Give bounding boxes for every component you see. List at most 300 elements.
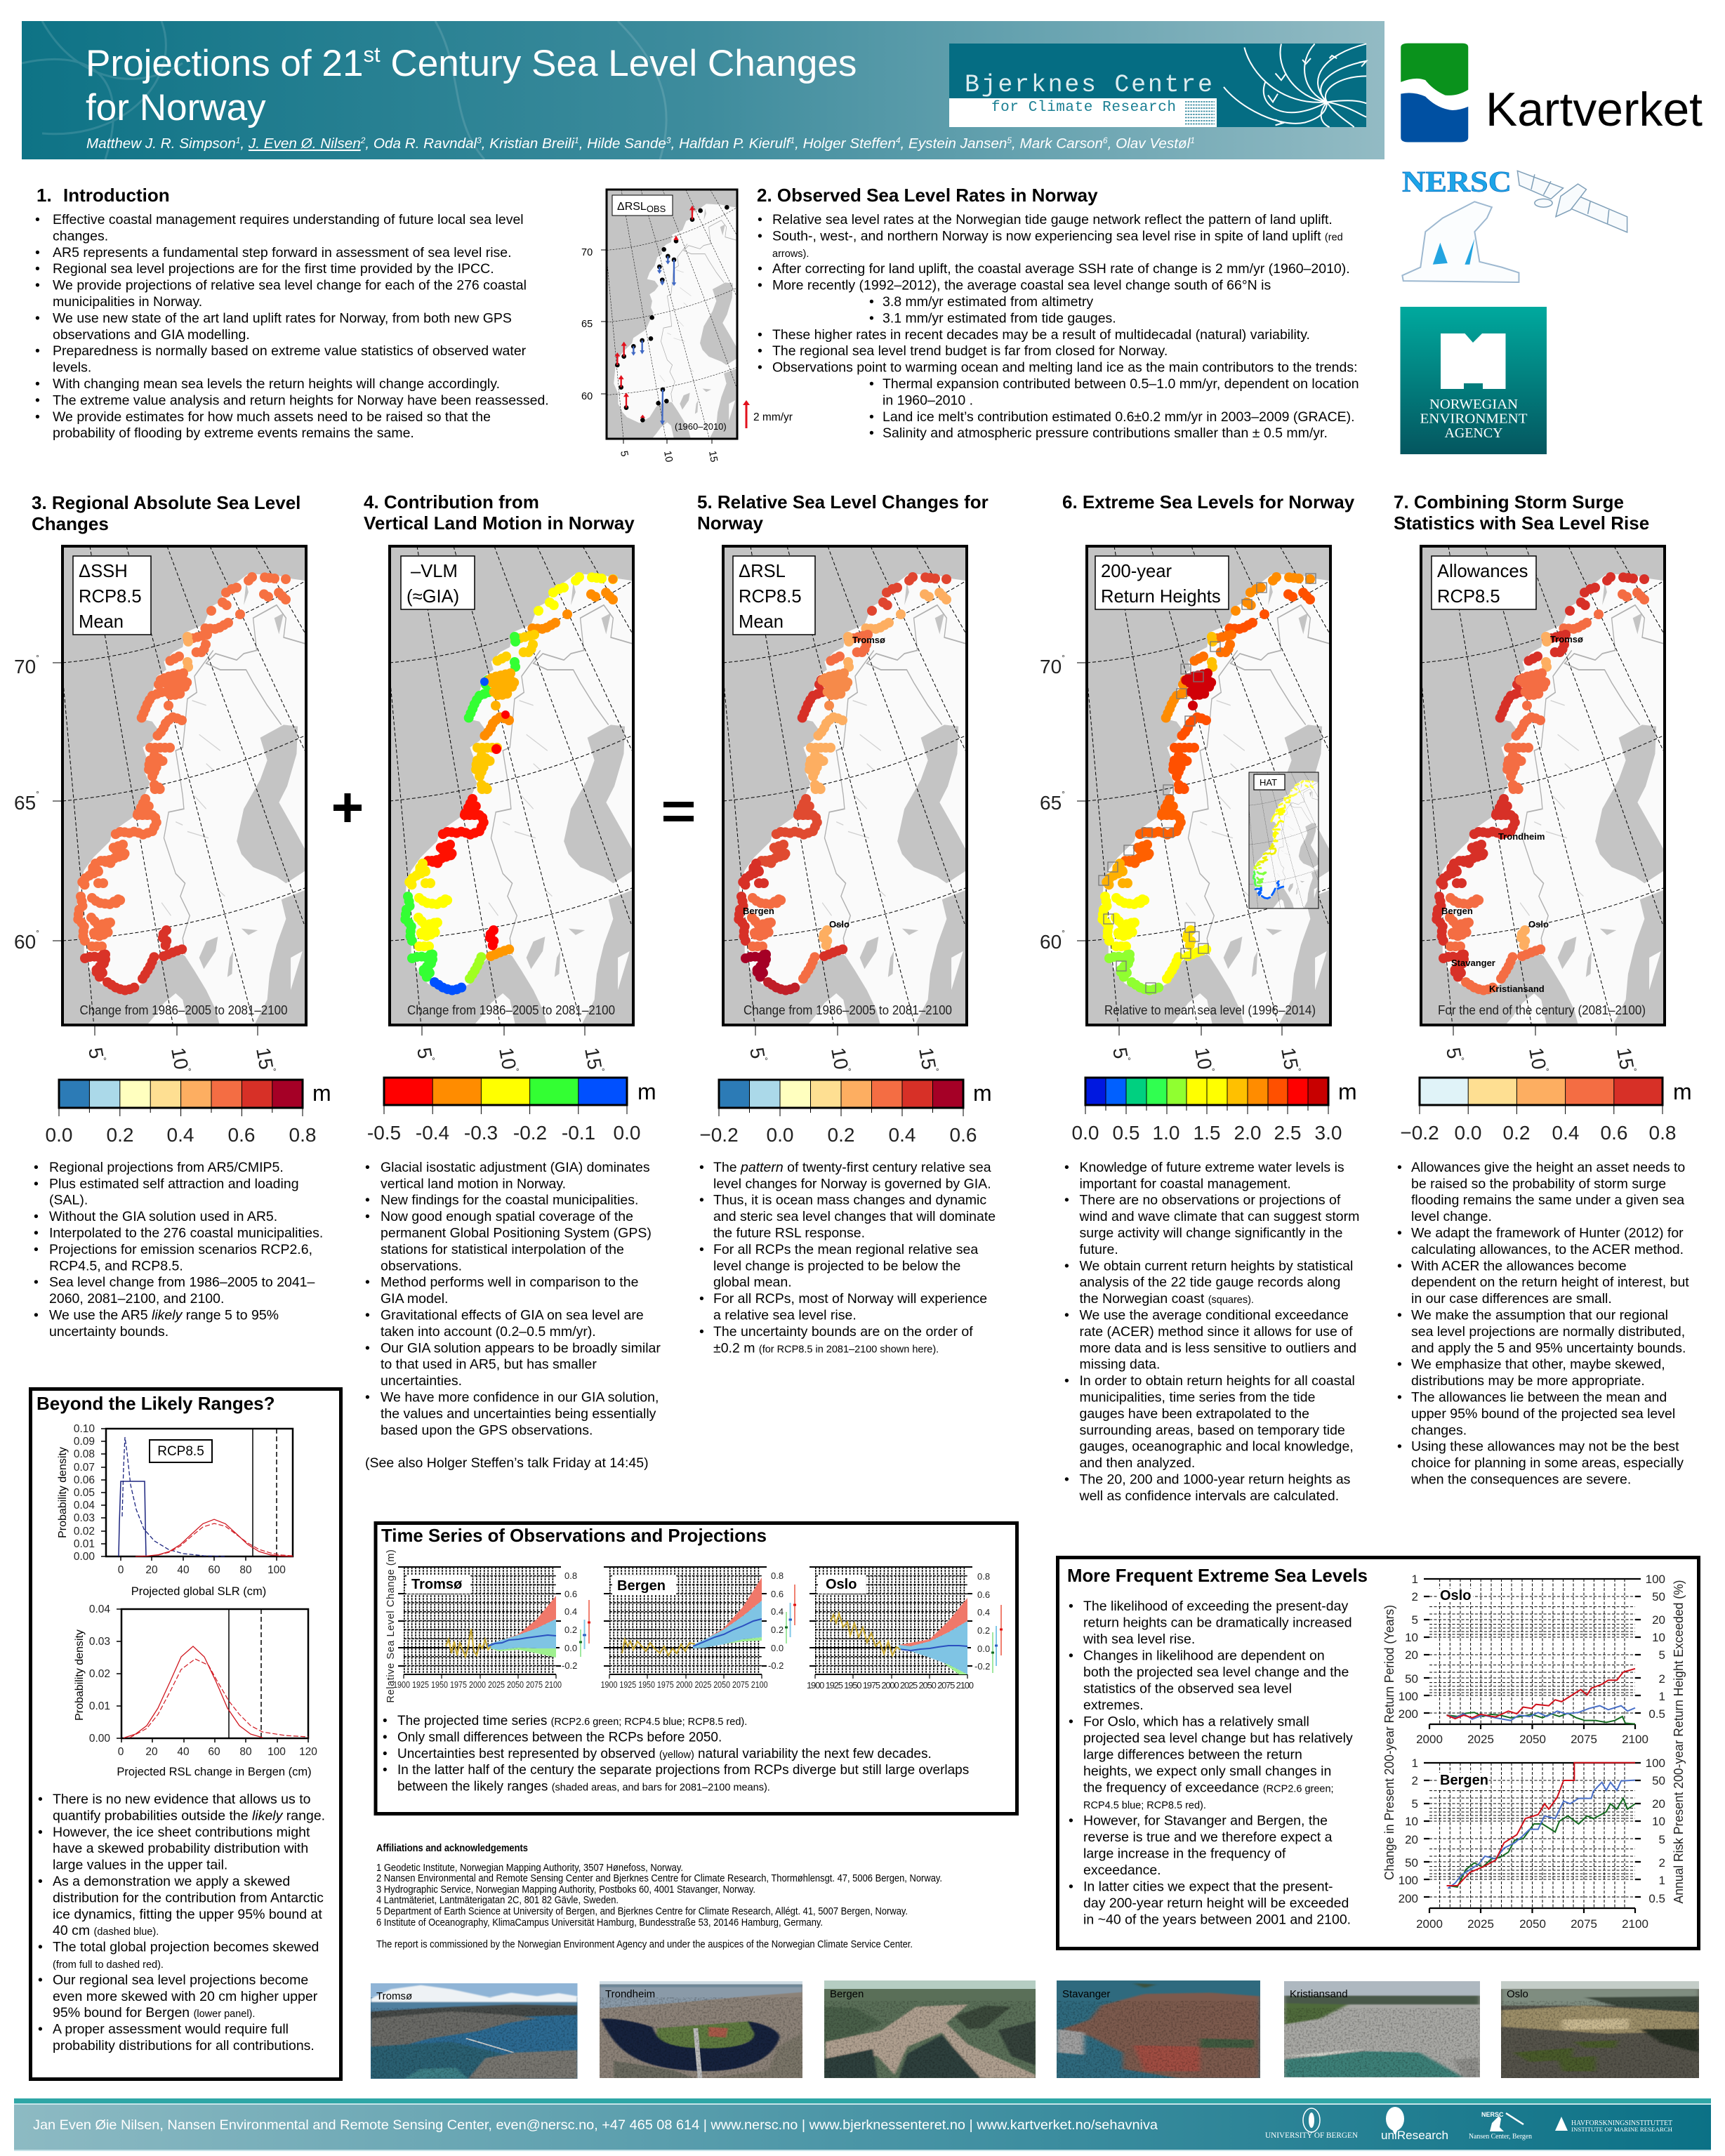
bullet list: the frequency of exceedance <box>1083 1780 1263 1796</box>
chart: projected RSL change in Bergen: 0.04 <box>89 1603 110 1615</box>
bullet list: 95% bound for Bergen <box>53 2005 194 2021</box>
chart: Bergen return period: 2025 <box>1467 1917 1494 1931</box>
longitude labels: ° <box>1456 1057 1466 1062</box>
longitude labels: ° <box>1206 1067 1217 1073</box>
bullet list: The uncertainty bounds are on the order of <box>713 1324 973 1340</box>
photo: Stavanger: Stavanger <box>1062 1988 1110 2000</box>
city labels: Stavanger <box>1451 958 1495 968</box>
legend: Mean <box>739 612 784 632</box>
logo: Nansen Center: Nansen Center, Bergen <box>1469 2133 1532 2141</box>
latitude labels: ° <box>1062 789 1065 799</box>
bullet list: • <box>365 1307 370 1323</box>
latitude labels: ° <box>36 653 39 663</box>
bullet list: Using these allowances may not be the best <box>1411 1439 1679 1455</box>
bullet list: • <box>365 1160 370 1175</box>
observation legend: OBS <box>647 204 666 214</box>
bullet list: Method performs well in comparison to the <box>381 1275 638 1290</box>
colour bar: 0.8 <box>1649 1122 1676 1144</box>
photo: Bergen <box>824 1980 1036 2078</box>
bullet list: • <box>1064 1258 1069 1274</box>
panel: 3. Regional Absolute Sea Level Changes <box>14 492 331 1340</box>
bullet list: • <box>1397 1439 1402 1455</box>
chart: projected RSL change in Bergen: 0 <box>118 1746 124 1758</box>
bullet list: There is no new evidence that allows us to <box>53 1792 311 1807</box>
bullet list: Plus estimated self attraction and loading <box>49 1176 299 1191</box>
bullet list: (dashed blue). <box>94 1926 159 1938</box>
chart: projected global SLR: 0.08 <box>74 1448 95 1460</box>
latitude labels: ° <box>36 789 39 799</box>
bullet list: • <box>1069 1599 1073 1614</box>
bullet list: • <box>38 1940 43 1955</box>
chart: Bergen return period <box>1399 1757 1665 1931</box>
panel: More Frequent Extreme Sea Levels <box>1057 1557 1699 1949</box>
chart: projected RSL change in Bergen: 0.03 <box>89 1636 110 1648</box>
bullet list: RCP4.5, and RCP8.5. <box>49 1258 183 1274</box>
colour bar: 0.0 <box>767 1124 793 1146</box>
bullet list: • <box>758 327 762 343</box>
heading: Time Series of Observations and Projections <box>381 1525 767 1546</box>
caption: Change from 1986–2005 to 2081–2100 <box>407 1003 615 1017</box>
axis labels: 70 <box>581 247 593 258</box>
heading: Vertical Land Motion in Norway <box>364 512 635 534</box>
bullet list: There are no observations or projections of <box>1080 1193 1341 1208</box>
chart: projected global SLR <box>57 1423 293 1598</box>
bullet list: • <box>869 294 874 310</box>
bullet list: calculating allowances, to the ACER method. <box>1411 1242 1684 1257</box>
bullet list: • <box>699 1324 704 1340</box>
chart: Bergen return period: 2075 <box>1571 1917 1597 1931</box>
bullet list: Relative sea level rates at the Norwegian tide gauge network reflect the pattern of land uplift. <box>772 212 1333 227</box>
longitude labels: 5 <box>1109 1046 1132 1060</box>
chart: projected RSL change in Bergen: 80 <box>239 1746 252 1758</box>
bullet list: • <box>758 228 762 244</box>
observation legend <box>612 195 673 216</box>
affiliations and acknowledgements: 3 Hydrographic Service, Norwegian Mapping Authority, Postboks 60, 4001 Stavanger, Norway. <box>376 1884 755 1896</box>
chart: Oslo: -0.2 <box>974 1661 990 1672</box>
longitude labels: ° <box>98 1057 108 1062</box>
chart: projected global SLR: 0.03 <box>74 1512 95 1524</box>
affiliations and acknowledgements: 2 Nansen Environmental and Remote Sensing Center and Bjerknes Centre for Climate Research, Thormøhlensgt. 47, 5006 Bergen, Norway. <box>376 1873 942 1884</box>
bullet list: • <box>38 1874 43 1889</box>
colour bar: 0.4 <box>889 1124 916 1146</box>
bullet list: We have more confidence in our GIA solution, <box>381 1390 659 1406</box>
logo: Bjerknes Centre <box>949 44 1366 127</box>
bullet list: changes. <box>53 228 108 244</box>
longitude labels: 15 <box>581 1046 606 1071</box>
bullet list: • <box>34 1275 39 1290</box>
colour bar: -0.3 <box>464 1122 498 1144</box>
chart: Bergen return period: 2000 <box>1416 1917 1443 1931</box>
chart: Bergen return period: 1 <box>1659 1874 1665 1887</box>
chart: Tromsø: -0.2 <box>562 1660 577 1671</box>
photo: Kristiansand: Kristiansand <box>1290 1988 1348 2000</box>
panel: 7. Combining Storm Surge Statistics <box>1394 491 1692 1487</box>
bullet list: 3.1 mm/yr estimated from tide gauges. <box>883 310 1116 326</box>
bullet list: After correcting for land uplift, the coastal average SSH rate of change is 2 mm/yr (1960–2010). <box>772 261 1350 277</box>
bullet list: We use the average conditional exceedance <box>1080 1307 1349 1323</box>
bullet list: • <box>38 1825 43 1840</box>
bullet list: (shaded areas, and bars for 2081–2100 means). <box>552 1783 770 1794</box>
heading: 5. Relative Sea Level Changes for <box>697 491 989 512</box>
chart: projected RSL change in Bergen: 0.00 <box>89 1733 110 1745</box>
bullet list: Gravitational effects of GIA on sea level are <box>381 1307 644 1323</box>
bullet list: The pattern of twenty-first century relative sea <box>713 1160 991 1175</box>
bullet list: level change is projected to be below the <box>713 1258 960 1274</box>
authors: Matthew J. R. Simpson <box>86 135 236 152</box>
bullet list: • <box>34 1176 39 1191</box>
colour bar: 0.2 <box>107 1124 133 1146</box>
chart: projected global SLR: 60 <box>208 1564 220 1576</box>
logo: University of Bergen: UNIVERSITY OF BERGEN <box>1265 2131 1359 2140</box>
bullet list: • <box>1064 1160 1069 1175</box>
chart: Bergen return period: 2050 <box>1519 1917 1546 1931</box>
bullet list: Thermal expansion contributed between 0.5–1.0 mm/yr, dependent on location <box>883 376 1359 392</box>
latitude labels: 70 <box>1040 656 1062 677</box>
colour bar: -0.2 <box>513 1122 547 1144</box>
bullet list: • <box>869 409 874 425</box>
longitude labels: ° <box>1628 1067 1639 1073</box>
bullet list: In the latter half of the century the separate projections from RCPs diverge but still large overlaps <box>397 1763 969 1778</box>
map: return heights <box>1077 546 1330 1036</box>
bullet list: Preparedness is normally based on extreme value statistics of observed water <box>53 343 527 359</box>
title: st <box>363 42 381 67</box>
colour bar: 0.4 <box>167 1124 194 1146</box>
bullet list: • <box>38 2022 43 2037</box>
longitude labels: ° <box>1123 1057 1132 1062</box>
authors: 3 <box>477 135 482 145</box>
bullet list: taken into account (0.2–0.5 mm/yr). <box>381 1324 596 1340</box>
bullet list: • <box>34 1209 39 1224</box>
scale arrow: 2 mm/yr <box>753 411 793 423</box>
bullet list: municipalities in Norway. <box>53 294 202 310</box>
longitude labels <box>84 1046 278 1075</box>
bullet list: • <box>34 1226 39 1241</box>
authors: , Oda R. Ravndal <box>365 135 477 152</box>
legend: Return Heights <box>1101 587 1221 607</box>
affiliations and acknowledgements: Affiliations and acknowledgements <box>376 1843 528 1854</box>
bullet list: and apply the 5 and 95% uncertainty bounds. <box>1411 1340 1686 1356</box>
photo: Tromsø: Tromsø <box>376 1990 412 2002</box>
chart: projected global SLR: 0 <box>118 1564 124 1576</box>
bullet list: We use new state of the art land uplift rates for Norway, from both new GPS <box>53 310 512 326</box>
bullet list: (See also Holger Steffen’s talk Friday at 14:45) <box>365 1455 649 1471</box>
bullet list: Knowledge of future extreme water levels is <box>1080 1160 1344 1175</box>
bullet list: • <box>365 1193 370 1208</box>
bullet list: We use the AR5 likely range 5 to 95% <box>49 1307 279 1323</box>
colour bar: 0.0 <box>1455 1122 1481 1144</box>
longitude labels: 5 <box>1442 1046 1465 1060</box>
chart: Oslo return period: 2000 <box>1416 1733 1443 1746</box>
legend <box>1095 556 1229 609</box>
bullet list: large values in the upper tail. <box>53 1858 227 1873</box>
chart: Oslo: 0.8 <box>977 1571 990 1582</box>
chart: Oslo return period: 0.5 <box>1648 1707 1665 1721</box>
bullet list: future. <box>1080 1242 1118 1257</box>
contact text: Jan Even Øie Nilsen, Nansen Environmental and Remote Sensing Center, even@nersc.no, +47 465 08 614 | www.nersc.no | www.bjerknessenteret.no | www.kartverket.no/sehavniva <box>33 2117 1158 2133</box>
bullet list: However, for Stavanger and Bergen, the <box>1083 1813 1328 1828</box>
axis labels: 5 <box>618 450 630 458</box>
longitude labels: ° <box>760 1057 769 1062</box>
chart: Bergen <box>601 1567 796 1690</box>
caption: Change from 1986–2005 to 2081–2100 <box>80 1003 288 1017</box>
legend: Allowances <box>1437 562 1528 581</box>
bullet list: large differences between the return <box>1083 1747 1302 1762</box>
bullet list: uncertainty bounds. <box>49 1324 168 1340</box>
bullet list: • <box>1397 1390 1402 1406</box>
city labels: Bergen <box>1441 906 1473 916</box>
bullet list: A proper assessment would require full <box>53 2022 289 2037</box>
logo: Bjerknes Centre: Bjerknes Centre <box>965 71 1212 99</box>
bullet list: the values and uncertainties being essentially <box>381 1406 656 1422</box>
bullet list: Uncertainties best represented by observed <box>397 1747 659 1761</box>
city labels: Oslo <box>829 919 850 930</box>
chart: projected global SLR: 0.06 <box>74 1474 95 1486</box>
logo: University of Bergen <box>1265 2108 1359 2140</box>
city labels: Kristiansand <box>1489 984 1545 994</box>
bullet list: • <box>383 1747 388 1761</box>
chart: Bergen: 1900 1925 1950 1975 2000 2025 2050 2075 2100 <box>601 1679 768 1690</box>
photo: Oslo: Oslo <box>1507 1988 1528 2000</box>
colour bar: m <box>1338 1079 1357 1104</box>
map: VLM <box>390 546 633 1036</box>
bullet list: gauges, oceanographic and local knowledge, <box>1080 1439 1354 1455</box>
bullet list: exceedance. <box>1083 1863 1161 1878</box>
chart: Oslo return period: 10 <box>1405 1631 1418 1644</box>
bullet list: We provide projections of relative sea level change for each of the 276 coastal <box>53 278 527 293</box>
bullet list: and steric sea level changes that will dominate <box>713 1209 996 1224</box>
chart: Bergen return period: 100 <box>1399 1874 1418 1887</box>
bullet list: The projected time series <box>397 1714 551 1728</box>
chart: Tromsø: 0.0 <box>564 1643 577 1653</box>
heading: 4. Contribution from <box>364 491 539 512</box>
colour bar <box>1400 1078 1692 1144</box>
bullet list: 40 cm <box>53 1923 94 1938</box>
authors: , Mark Carson <box>1012 135 1103 152</box>
colour bar: -0.1 <box>562 1122 595 1144</box>
bullet list: to that used in AR5, but has smaller <box>381 1357 597 1373</box>
affiliations and acknowledgements: 4 Lantmäteriet, Lantmäterigatan 2C, 801 82 Gävle, Sweden. <box>376 1895 619 1906</box>
bullet list: in our case differences are small. <box>1411 1291 1612 1307</box>
bullet list: • <box>1069 1714 1073 1730</box>
city labels: Bergen <box>743 906 774 916</box>
authors: 1 <box>574 135 579 145</box>
bullet list: important for coastal management. <box>1080 1176 1291 1191</box>
bullet list: With ACER the allowances become <box>1411 1258 1627 1274</box>
bullet list: For all RCPs, most of Norway will experience <box>713 1291 987 1307</box>
affiliations and acknowledgements: 1 Geodetic Institute, Norwegian Mapping Authority, 3507 Hønefoss, Norway. <box>376 1863 683 1874</box>
chart: Bergen return period: 10 <box>1652 1815 1665 1828</box>
chart: projected global SLR: 40 <box>177 1564 190 1576</box>
legend: RCP8.5 <box>1437 587 1500 607</box>
heading: Beyond the Likely Ranges? <box>37 1393 275 1414</box>
longitude labels: 5 <box>413 1046 436 1060</box>
legend: RCP8.5 <box>739 587 802 607</box>
bullet list: quantify probabilities outside the likely range. <box>53 1808 325 1823</box>
bullet list: • <box>758 278 762 293</box>
bullet list: extremes. <box>1083 1698 1144 1713</box>
chart: projected global SLR: 80 <box>239 1564 252 1576</box>
caption: For the end of the century (2081–2100) <box>1438 1003 1646 1017</box>
chart: Tromsø: 1900 1925 1950 1975 2000 2025 2050 2075 2100 <box>393 1679 562 1690</box>
colour bar <box>46 1080 331 1146</box>
legend: 200-year <box>1101 562 1172 581</box>
heading: Statistics with Sea Level Rise <box>1394 512 1649 534</box>
logo: Uni Research: uniResearch <box>1381 2129 1448 2142</box>
bullet list: In latter cities we expect that the present- <box>1083 1879 1333 1894</box>
chart: Bergen return period: 2100 <box>1622 1917 1648 1931</box>
chart: Tromsø: 0.6 <box>564 1589 577 1599</box>
latitude labels: 65 <box>14 792 36 814</box>
legend: Mean <box>79 612 124 632</box>
colour bar: 0.6 <box>950 1124 977 1146</box>
bullet list: For Oslo, which has a relatively small <box>1083 1714 1309 1730</box>
icon: satellite <box>1517 171 1627 232</box>
y axis labels <box>1382 1580 1686 1904</box>
bullet list: • <box>869 310 874 326</box>
bullet list: In order to obtain return heights for all coastal <box>1080 1373 1355 1389</box>
chart: Oslo return period: 1 <box>1659 1690 1665 1703</box>
city labels: Tromsø <box>1550 634 1583 644</box>
bullet list: return heights can be dramatically increased <box>1083 1615 1352 1630</box>
panel: Time Series of Observations and Projections <box>376 1523 1017 1814</box>
panel: 2. Observed Sea Level Rates <box>757 185 1359 441</box>
bullet list: well as confidence intervals are calculated. <box>1078 1488 1339 1504</box>
chart: projected global SLR: 20 <box>145 1564 158 1576</box>
authors: 6 <box>1103 135 1108 145</box>
bullet list: (for RCP8.5 in 2081–2100 shown here). <box>759 1344 939 1355</box>
panel: 1. Introduction <box>35 185 549 441</box>
legend <box>401 556 475 609</box>
bullet list: • <box>35 392 40 408</box>
longitude labels: ° <box>1293 1067 1303 1073</box>
legend <box>73 556 151 635</box>
authors: , Kristian Breili <box>482 135 575 152</box>
colour bar <box>367 1078 656 1144</box>
longitude labels: ° <box>596 1067 607 1073</box>
chart: Oslo return period: 2 <box>1412 1590 1418 1603</box>
bullet list: • <box>1064 1193 1069 1208</box>
bullet list: Regional projections from AR5/CMIP5. <box>49 1160 284 1175</box>
bullet list: be raised so the probability of storm surge <box>1411 1176 1666 1191</box>
bullet list: rate (ACER) method since it allows for use of <box>1080 1324 1353 1340</box>
bullet list: when the consequences are severe. <box>1410 1471 1631 1487</box>
bullet list: reverse is true and we therefore expect a <box>1083 1830 1333 1845</box>
bullet list: Interpolated to the 276 coastal municipalities. <box>49 1226 323 1241</box>
city labels: Trondheim <box>1498 831 1545 842</box>
bullet list: Sea level change from 1986–2005 to 2041– <box>49 1275 315 1290</box>
longitude labels: ° <box>930 1067 941 1073</box>
chart: projected global SLR: Probability density <box>57 1447 69 1538</box>
icon: polar bear <box>1402 201 1519 282</box>
chart: Oslo return period: 20 <box>1652 1613 1665 1627</box>
longitude labels <box>1109 1046 1303 1075</box>
logo: Havforskningsinstituttet <box>1555 2117 1672 2133</box>
logo: Norwegian Environment Agency <box>1400 307 1547 454</box>
bullet list: • <box>1397 1357 1402 1373</box>
bullet list: • <box>1397 1226 1402 1241</box>
bullet list: missing data. <box>1080 1357 1160 1373</box>
chart: Bergen return period: 50 <box>1405 1856 1418 1870</box>
chart: Bergen return period: 200 <box>1399 1892 1418 1905</box>
chart: Bergen return period: 10 <box>1405 1815 1418 1828</box>
axis labels: 15 <box>706 450 720 463</box>
authors: , Eystein Jansen <box>901 135 1007 152</box>
chart: Oslo return period: 50 <box>1405 1672 1418 1686</box>
bullet list: have a skewed probability distribution with <box>53 1841 308 1856</box>
panel: 5. Relative Sea Level Changes <box>697 491 996 1356</box>
chart: Bergen return period: 5 <box>1412 1797 1418 1811</box>
longitude labels: ° <box>1540 1067 1551 1073</box>
bullet list: • <box>869 425 874 441</box>
chart: Oslo return period: 20 <box>1405 1648 1418 1662</box>
bullet list: municipalities, time series from the tide <box>1080 1390 1315 1406</box>
chart: Bergen return period: 0.5 <box>1648 1892 1665 1905</box>
affiliations and acknowledgements: The report is commissioned by the Norwegian Environment Agency and under the auspices of the Norwegian Climate Service Center. <box>376 1939 913 1950</box>
latitude labels: ° <box>1062 653 1065 663</box>
bullet list: Observations point to warming ocean and melting land ice as the main contributors to the trends: <box>772 360 1358 376</box>
bullet list: With changing mean sea levels the return heights will change accordingly. <box>53 376 500 392</box>
affiliations and acknowledgements: 5 Department of Earth Science at University of Bergen, and Bjerknes Centre for Climate Research, Allégt. 41, 5007 Bergen, Norway. <box>376 1906 908 1917</box>
colour bar: m <box>973 1080 992 1106</box>
bullet list: New findings for the coastal municipalities. <box>381 1193 638 1208</box>
bullet list: • <box>1069 1879 1073 1894</box>
colour bar: -0.5 <box>367 1122 401 1144</box>
chart: Bergen return period: 100 <box>1646 1757 1665 1770</box>
bullet list: day 200-year return height will be exceeded <box>1083 1896 1349 1911</box>
chart: projected RSL change in Bergen: 120 <box>299 1746 317 1758</box>
y axis label: Relative Sea Level Change (m) <box>385 1549 397 1702</box>
colour bar: −0.2 <box>1400 1122 1439 1144</box>
bullet list: • <box>699 1160 704 1175</box>
arrows and gauges <box>614 205 729 425</box>
bullet list: level changes for Norway is governed by GIA. <box>713 1176 991 1191</box>
authors: , Holger Steffen <box>795 135 896 152</box>
chart: projected RSL change in Bergen: 40 <box>177 1746 190 1758</box>
title: Projections of 21 <box>86 43 363 84</box>
colour bar: 2.5 <box>1274 1122 1301 1144</box>
bullet list: We obtain current return heights by statistical <box>1080 1258 1353 1274</box>
bullet list: dependent on the return height of interest, but <box>1411 1275 1689 1290</box>
bullet list: As a demonstration we apply a skewed <box>53 1874 290 1889</box>
bullet list: • <box>35 343 40 359</box>
bullet list: Now good enough spatial coverage of the <box>381 1209 633 1224</box>
bullet list: the future RSL response. <box>713 1226 865 1241</box>
authors: , Olav Vestøl <box>1108 135 1191 152</box>
chart: Oslo: 0.0 <box>977 1644 990 1654</box>
bullet list: Without the GIA solution used in AR5. <box>49 1209 277 1224</box>
bullet list: • <box>699 1291 704 1307</box>
longitude labels: 15 <box>915 1046 940 1071</box>
photo: Stavanger <box>1057 1980 1260 2078</box>
photo strip <box>371 1980 1699 2079</box>
chart: projected RSL change in Bergen: 60 <box>208 1746 220 1758</box>
logo: Nansen Center: NERSC <box>1481 2111 1504 2118</box>
longitude labels: 10 <box>1525 1046 1550 1071</box>
chart: Oslo return period: 100 <box>1399 1690 1418 1703</box>
longitude labels: 10 <box>167 1046 192 1071</box>
bullet list: • <box>35 409 40 425</box>
bullet list: • <box>38 1792 43 1807</box>
longitude labels: ° <box>427 1057 437 1062</box>
bullet list: • <box>383 1763 388 1778</box>
colour bar: 0.6 <box>1601 1122 1627 1144</box>
affiliations and acknowledgements <box>376 1843 942 1950</box>
bullet list: levels. <box>53 360 91 376</box>
chart: Bergen return period: 5 <box>1659 1833 1665 1846</box>
bullet list: • <box>365 1340 370 1356</box>
bullet list: Thus, it is ocean mass changes and dynamic <box>713 1193 986 1208</box>
authors: 1 <box>790 135 795 145</box>
